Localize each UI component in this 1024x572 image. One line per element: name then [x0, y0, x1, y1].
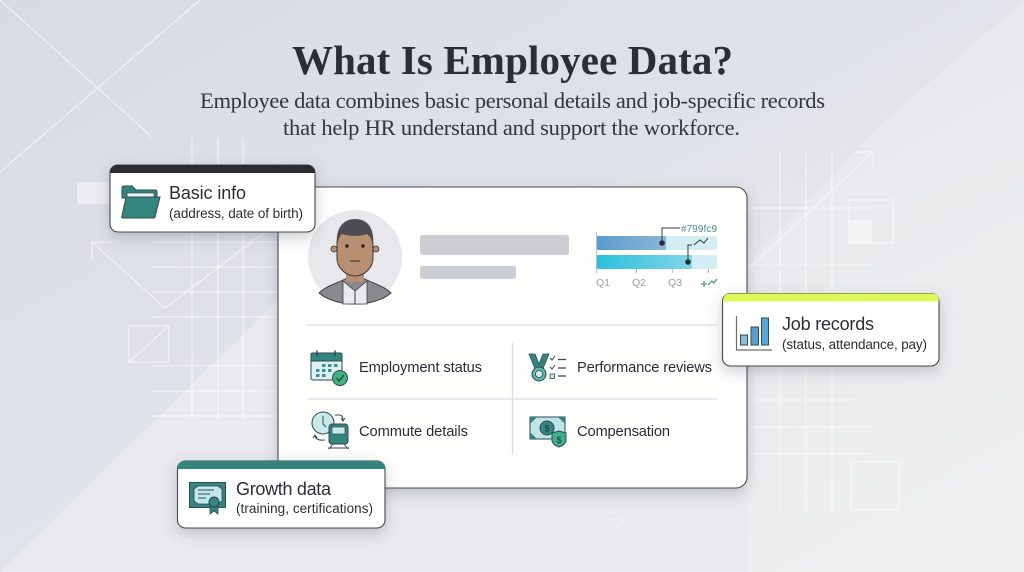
chart: progress bars: #799fc9: [681, 224, 717, 235]
icon: calendar: [311, 350, 348, 386]
subtitle: Employee data combines basic personal details and job-specific records: [200, 88, 825, 113]
name placeholder bars: [420, 235, 569, 279]
icon: bar chart: [736, 316, 772, 350]
chart: progress bars: Q2: [632, 277, 646, 289]
callout: job records: (status, attendance, pay): [782, 337, 927, 352]
item: compensation: [530, 417, 670, 447]
callout: growth data: Growth data: [236, 479, 332, 499]
callout: job records: Job records: [782, 314, 874, 334]
subtitle: [200, 88, 825, 140]
item: employment status: Employment status: [359, 360, 482, 376]
panel: employee profile card: [278, 187, 747, 488]
icon: medal checklist: [529, 354, 566, 381]
callout: growth data: (training, certifications): [236, 501, 373, 516]
avatar: [308, 210, 402, 304]
item: commute details: Commute details: [359, 424, 468, 440]
item: compensation: Compensation: [577, 424, 670, 440]
icon: banknote and shield: $: [556, 435, 562, 445]
icon: banknote and shield: $: [544, 424, 550, 434]
callout: basic info: Basic info: [169, 183, 246, 203]
chart: progress bars: [596, 224, 717, 289]
callout: growth data: [178, 461, 385, 528]
item: commute details: [312, 412, 468, 449]
item: performance reviews: [529, 354, 712, 381]
item: employment status: [311, 350, 482, 386]
icon: banknote and shield: [530, 417, 566, 447]
icon: clock and train: [312, 412, 349, 449]
chart: progress bars: Q1: [596, 277, 610, 289]
callout: basic info: (address, date of birth): [169, 206, 303, 221]
icon: folder: [122, 186, 160, 218]
chart: progress bars: Q3: [668, 277, 682, 289]
dividers: [307, 325, 717, 455]
icon: certificate: [190, 482, 226, 514]
item: performance reviews: Performance reviews: [577, 360, 712, 376]
title: What Is Employee Data?: [292, 37, 733, 83]
callout: job records: [722, 294, 939, 366]
subtitle: that help HR understand and support the workforce.: [283, 115, 740, 140]
callout: basic info: [110, 165, 315, 232]
